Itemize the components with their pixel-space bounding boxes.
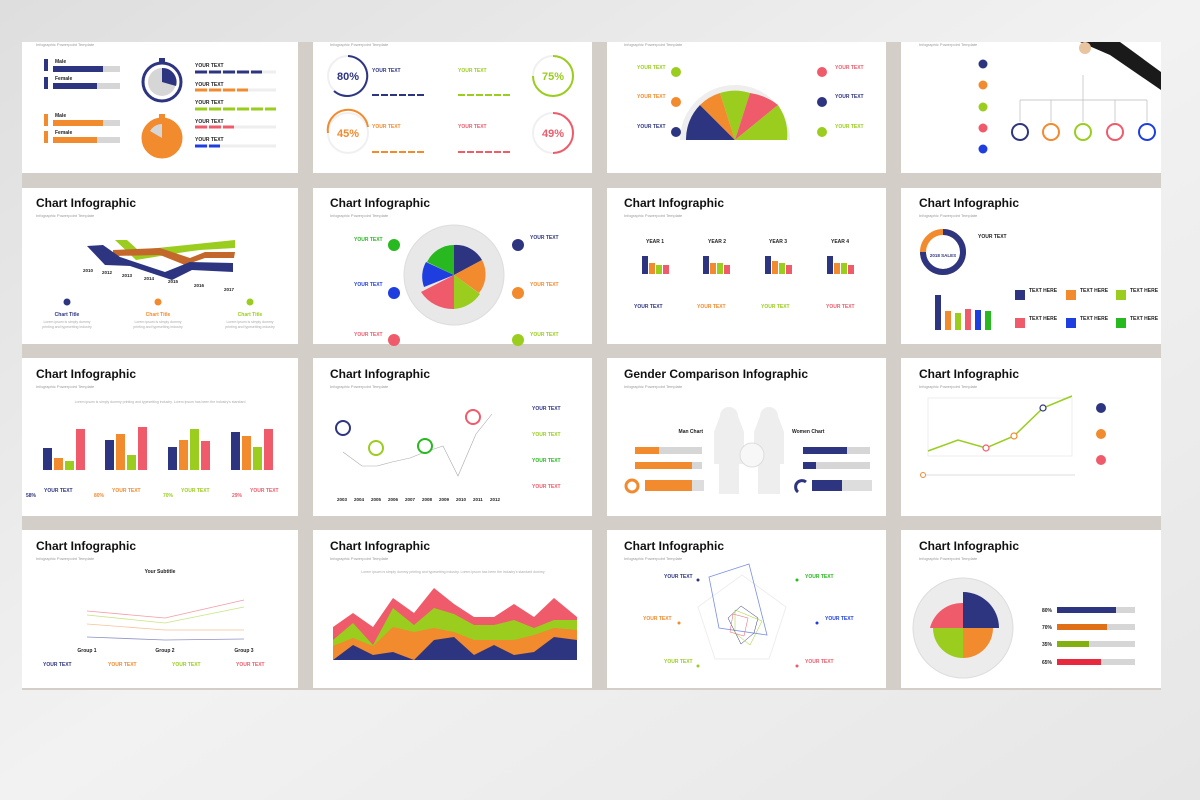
slide: grouped bars: YOUR TEXT — [112, 488, 141, 494]
slide: polar pie and result bars: 80% — [1042, 608, 1053, 614]
slide: gender stopwatch: YOUR TEXT — [195, 82, 224, 88]
slide: sales donut: TEXT HERE — [1029, 316, 1058, 322]
slide: half-circle fan: YOUR TEXT — [637, 65, 666, 71]
slide: pin line chart: 2011 — [473, 497, 483, 502]
slide: half-circle fan: YOUR TEXT — [637, 94, 666, 100]
slide: line chart with markers: Chart Infographic — [919, 367, 1019, 381]
slide: pin line chart: YOUR TEXT — [532, 406, 561, 412]
slide: 3D ribbon chart: 2015 — [168, 279, 179, 284]
slide: gender stopwatch: Male — [55, 113, 66, 119]
slide: multi-line chart: Infographic Powerpoint Template — [36, 556, 95, 561]
slide: 3D ribbon chart: printing and typesetting industry — [133, 325, 183, 329]
slide: grouped bars: YOUR TEXT — [44, 488, 73, 494]
slide: yearly bars: YOUR TEXT — [761, 304, 790, 310]
slide: multi-line chart: YOUR TEXT — [236, 662, 265, 668]
slide: yearly bars: YEAR 1 — [646, 239, 664, 245]
slide: percent circles: 80% — [337, 71, 359, 83]
slide: gender stopwatch: Female — [55, 76, 72, 82]
slide: 3D ribbon chart: printing and typesetting industry — [225, 325, 275, 329]
slide: yearly bars: YOUR TEXT — [634, 304, 663, 310]
slide: percent circles: 75% — [542, 71, 564, 83]
slide: stacked area chart: Infographic Powerpoint Template — [330, 556, 389, 561]
slide: yearly bars: YEAR 4 — [831, 239, 849, 245]
slide: pin line chart: Chart Infographic — [330, 367, 430, 381]
slide: 3D ribbon chart: Chart Title — [55, 312, 80, 318]
slide: sales donut: 2018 SALES — [930, 253, 956, 258]
slide: 3D ribbon chart: Lorem ipsum is simply dummy — [134, 320, 182, 324]
slide: pin line chart: 2010 — [456, 497, 467, 502]
slide: 3D ribbon chart: 2017 — [224, 287, 235, 292]
slide: gender stopwatch: YOUR TEXT — [195, 100, 224, 106]
slide: polar pie and result bars: 65% — [1042, 660, 1053, 666]
slide: line chart with markers: Infographic Powerpoint Template — [919, 384, 978, 389]
slide: half-circle fan: YOUR TEXT — [835, 65, 864, 71]
slide: grouped bars: Lorem ipsum is simply dummy printing and typesetting industry. Lorem ipsum has been the industry's standard — [75, 400, 245, 404]
slide: radial pie: YOUR TEXT — [354, 237, 383, 243]
slide: pin line chart: 2006 — [388, 497, 399, 502]
slide: gender stopwatch — [22, 42, 298, 173]
slide: gender stopwatch: YOUR TEXT — [195, 119, 224, 125]
slide: multi-line chart: Your Subtitle — [145, 569, 176, 575]
slide: polar pie and result bars: 35% — [1042, 642, 1053, 648]
slide: radial pie: YOUR TEXT — [530, 332, 559, 338]
slide: radar chart: YOUR TEXT — [664, 659, 693, 665]
slide: percent circles: YOUR TEXT — [372, 124, 401, 130]
slide: multi-line chart: YOUR TEXT — [43, 662, 72, 668]
slide: pin line chart: 2007 — [405, 497, 416, 502]
slide: pin line chart: 2005 — [371, 497, 382, 502]
slide: polar pie and result bars: Chart Infographic — [919, 539, 1019, 553]
slide: multi-line chart: YOUR TEXT — [108, 662, 137, 668]
slide: polar pie and result bars: Infographic Powerpoint Template — [919, 556, 978, 561]
slide: gender stopwatch: Female — [55, 130, 72, 136]
slide: 3D ribbon chart: printing and typesetting industry — [42, 325, 92, 329]
slide: pin line chart: YOUR TEXT — [532, 484, 561, 490]
slide: radial pie: YOUR TEXT — [354, 282, 383, 288]
slide: 3D ribbon chart: 2010 — [83, 268, 94, 273]
slide: radar chart: Infographic Powerpoint Template — [624, 556, 683, 561]
slide: multi-line chart: YOUR TEXT — [172, 662, 201, 668]
slide: multi-line chart: Group 2 — [155, 648, 175, 654]
slide: grouped bars: Infographic Powerpoint Template — [36, 384, 95, 389]
slide: pin line chart: YOUR TEXT — [532, 432, 561, 438]
slide: radial pie: Infographic Powerpoint Template — [330, 213, 389, 218]
slide: percent circles: 45% — [337, 128, 359, 140]
slide: grouped bars: 29% — [232, 493, 243, 499]
slide: percent circles: YOUR TEXT — [458, 124, 487, 130]
slide: hierarchy tree — [901, 42, 1161, 173]
slide: yearly bars: YOUR TEXT — [697, 304, 726, 310]
slide: gender stopwatch: YOUR TEXT — [195, 137, 224, 143]
slide: gender stopwatch: YOUR TEXT — [195, 63, 224, 69]
slide: percent circles: YOUR TEXT — [458, 68, 487, 74]
slide: grouped bars: 70% — [163, 493, 174, 499]
slide: radar chart: YOUR TEXT — [643, 616, 672, 622]
slide: half-circle fan: YOUR TEXT — [835, 94, 864, 100]
slide: radial pie: Chart Infographic — [330, 196, 430, 210]
slide: sales donut: TEXT HERE — [1130, 316, 1159, 322]
slide: yearly bars: Chart Infographic — [624, 196, 724, 210]
slide: sales donut — [901, 188, 1161, 344]
slide: sales donut: TEXT HERE — [1029, 288, 1058, 294]
slide: multi-line chart — [22, 530, 298, 688]
slide: grouped bars: YOUR TEXT — [250, 488, 279, 494]
slide: 3D ribbon chart: Infographic Powerpoint Template — [36, 213, 95, 218]
slide: gender comparison — [607, 358, 886, 516]
slide: pin line chart: Infographic Powerpoint Template — [330, 384, 389, 389]
slide: 3D ribbon chart: 2013 — [122, 273, 133, 278]
slide: stacked area chart: Lorem ipsum is simply dummy printing and typesetting industry. Lorem ipsum has been the industry's standard dummy — [361, 570, 545, 574]
slide: grouped bars: 80% — [94, 493, 105, 499]
slide: multi-line chart: Group 1 — [77, 648, 97, 654]
slide: pin line chart: 2008 — [422, 497, 433, 502]
slide: yearly bars — [607, 188, 886, 344]
slide: sales donut: YOUR TEXT — [978, 234, 1007, 240]
slide: sales donut: TEXT HERE — [1130, 288, 1159, 294]
slide: stacked area chart: Chart Infographic — [330, 539, 430, 553]
slide: stacked area chart — [313, 530, 592, 688]
slide: radar chart — [607, 530, 886, 688]
slide: yearly bars: Infographic Powerpoint Template — [624, 213, 683, 218]
slide: sales donut: TEXT HERE — [1080, 288, 1109, 294]
board background — [22, 42, 1161, 690]
slide: 3D ribbon chart: Chart Infographic — [36, 196, 136, 210]
slide: radar chart: YOUR TEXT — [664, 574, 693, 580]
slide: percent circles — [313, 42, 592, 173]
slide: 3D ribbon chart: 2016 — [194, 283, 205, 288]
slide: radial pie: YOUR TEXT — [530, 235, 559, 241]
slide: yearly bars: YEAR 3 — [769, 239, 787, 245]
slide: sales donut: Chart Infographic — [919, 196, 1019, 210]
slide: pin line chart: 2003 — [337, 497, 348, 502]
slide: grouped bars: YOUR TEXT — [181, 488, 210, 494]
slide: line chart with markers — [901, 358, 1161, 516]
slide: hierarchy tree: Infographic Powerpoint Template — [919, 42, 978, 47]
slide: radar chart: YOUR TEXT — [805, 574, 834, 580]
slide: pin line chart: 2012 — [490, 497, 501, 502]
slide: 3D ribbon chart: 2014 — [144, 276, 155, 281]
slide: yearly bars: YEAR 2 — [708, 239, 726, 245]
slide: half-circle fan: Infographic Powerpoint Template — [624, 42, 683, 47]
slide: percent circles: YOUR TEXT — [372, 68, 401, 74]
slide: gender comparison: Women Chart — [792, 429, 825, 435]
slide: gender stopwatch: Male — [55, 59, 66, 65]
slide: gender comparison: Infographic Powerpoint Template — [624, 384, 683, 389]
slide: radar chart: Chart Infographic — [624, 539, 724, 553]
slide: pin line chart: 2009 — [439, 497, 450, 502]
slide: half-circle fan — [607, 42, 886, 173]
slide: yearly bars: YOUR TEXT — [826, 304, 855, 310]
slide: multi-line chart: Group 3 — [234, 648, 254, 654]
slide: radial pie — [313, 188, 592, 346]
slide: sales donut: TEXT HERE — [1080, 316, 1109, 322]
slide: gender comparison: Gender Comparison Infographic — [624, 367, 808, 381]
slide: percent circles: Infographic Powerpoint Template — [330, 42, 389, 47]
slide: multi-line chart: Chart Infographic — [36, 539, 136, 553]
slide: polar pie and result bars — [901, 530, 1161, 688]
slide: percent circles: 49% — [542, 128, 564, 140]
slide: 3D ribbon chart: Lorem ipsum is simply dummy — [43, 320, 91, 324]
slide: radial pie: YOUR TEXT — [354, 332, 383, 338]
slide: sales donut: Infographic Powerpoint Template — [919, 213, 978, 218]
slide: 3D ribbon chart: Lorem ipsum is simply dummy — [226, 320, 274, 324]
slide: 3D ribbon chart — [22, 188, 298, 344]
slide: 3D ribbon chart: Chart Title — [238, 312, 263, 318]
slide: grouped bars — [22, 358, 298, 516]
slide: half-circle fan: YOUR TEXT — [637, 124, 666, 130]
slide: radar chart: YOUR TEXT — [825, 616, 854, 622]
slide: 3D ribbon chart: Chart Title — [146, 312, 171, 318]
slide: polar pie and result bars: 70% — [1042, 625, 1053, 631]
slide: half-circle fan: YOUR TEXT — [835, 124, 864, 130]
slide: gender comparison: Man Chart — [679, 429, 703, 435]
slide: gender stopwatch: Infographic Powerpoint Template — [36, 42, 95, 47]
slide: 3D ribbon chart: 2012 — [102, 270, 113, 275]
slide: grouped bars: Chart Infographic — [36, 367, 136, 381]
slide: pin line chart: YOUR TEXT — [532, 458, 561, 464]
slide: radar chart: YOUR TEXT — [805, 659, 834, 665]
slide: pin line chart — [313, 358, 592, 516]
slide: pin line chart: 2004 — [354, 497, 365, 502]
slide: radial pie: YOUR TEXT — [530, 282, 559, 288]
slide: grouped bars: 58% — [26, 493, 37, 499]
